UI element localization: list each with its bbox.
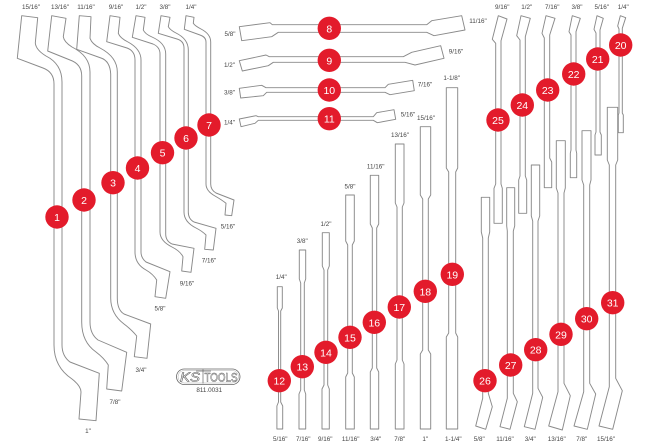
wrench 13: 3/8 x 7/16: 13 bbox=[296, 362, 308, 374]
wrench 4: 9/16 x 5/8: 5/8" bbox=[154, 306, 166, 312]
wrench 9: 1/2 x 9/16: 9 bbox=[326, 55, 332, 67]
wrench 23: 7/16 bbox=[536, 4, 560, 188]
wrench 28: 3/4: 28 bbox=[530, 345, 542, 357]
wrench 7: 1/4 x 5/16 bbox=[184, 4, 235, 230]
wrench 5: 1/2 x 9/16: 1/2" bbox=[136, 4, 146, 11]
wrench 1: 15/16 x 1 bbox=[17, 4, 99, 435]
wrench 11: 1/4 x 5/16: 1/4" bbox=[224, 120, 235, 126]
wrench 14: 1/2 x 9/16: 1/2" bbox=[320, 221, 332, 228]
wrench 27: 11/16: 11/16" bbox=[496, 436, 514, 443]
wrench 19: 1-1/8 x 1-1/4: 1-1/4" bbox=[445, 436, 462, 443]
wrench 28: 3/4: 3/4" bbox=[525, 436, 536, 443]
wrench 26: 5/8 bbox=[473, 197, 497, 443]
wrench 19: 1-1/8 x 1-1/4: 19 bbox=[446, 269, 458, 281]
wrench 5: 1/2 x 9/16 bbox=[132, 4, 194, 288]
wrench 12: 1/4 x 5/16 bbox=[268, 274, 291, 443]
wrench 14: 1/2 x 9/16: 14 bbox=[320, 347, 332, 359]
wrench 3: 11/16 x 3/4 bbox=[77, 4, 151, 374]
KS Tools logo: KS bbox=[180, 370, 201, 384]
wrench 12: 1/4 x 5/16: 1/4" bbox=[276, 274, 287, 281]
wrench 16: 11/16 x 3/4 bbox=[363, 164, 386, 443]
wrench 13: 3/8 x 7/16 bbox=[291, 238, 314, 443]
KS Tools logo bbox=[176, 369, 240, 394]
wrench 17: 13/16 x 7/8: 13/16" bbox=[391, 132, 409, 139]
wrench 6: 3/8 x 7/16 bbox=[158, 4, 216, 264]
wrench 4: 9/16 x 5/8 bbox=[107, 4, 170, 312]
wrench 10: 3/8 x 7/16 bbox=[224, 78, 432, 102]
wrench 18: 15/16 x 1: 18 bbox=[419, 286, 431, 298]
wrench 4: 9/16 x 5/8: 4 bbox=[135, 163, 141, 175]
wrench 22: 3/8: 22 bbox=[568, 69, 580, 81]
wrench 24: 1/2: 1/2" bbox=[521, 4, 532, 11]
wrench 1: 15/16 x 1: 1" bbox=[85, 428, 91, 435]
wrench 21: 5/16: 5/16" bbox=[594, 4, 609, 11]
wrench 2: 13/16 x 7/8: 13/16" bbox=[51, 4, 69, 11]
KS Tools logo: TOOLS bbox=[204, 370, 238, 384]
wrench 6: 3/8 x 7/16: 3/8" bbox=[160, 4, 170, 11]
wrench 20: 1/4: 1/4" bbox=[618, 4, 629, 11]
wrench 12: 1/4 x 5/16: 12 bbox=[273, 376, 285, 388]
wrench 6: 3/8 x 7/16: 6 bbox=[183, 133, 189, 145]
wrench 3: 11/16 x 3/4: 3/4" bbox=[136, 367, 146, 374]
wrench 10: 3/8 x 7/16: 3/8" bbox=[224, 90, 235, 96]
wrench 14: 1/2 x 9/16 bbox=[314, 221, 338, 443]
wrench 29: 13/16: 13/16" bbox=[548, 436, 566, 443]
wrench 13: 3/8 x 7/16: 7/16" bbox=[296, 436, 311, 443]
wrench 20: 1/4 bbox=[609, 4, 632, 133]
wrench 11: 1/4 x 5/16 bbox=[224, 107, 415, 130]
wrench 7: 1/4 x 5/16: 1/4" bbox=[186, 4, 196, 11]
wrench 13: 3/8 x 7/16: 3/8" bbox=[297, 238, 308, 245]
wrench 20: 1/4: 20 bbox=[615, 40, 627, 52]
wrench 14: 1/2 x 9/16: 9/16" bbox=[318, 436, 333, 443]
wrench 15: 5/8 x 11/16: 11/16" bbox=[342, 436, 359, 443]
wrench 15: 5/8 x 11/16 bbox=[338, 184, 362, 443]
wrench 29: 13/16: 29 bbox=[555, 329, 567, 341]
wrench 8: 5/8 x 11/16 bbox=[224, 16, 487, 41]
wrench 16: 11/16 x 3/4: 11/16" bbox=[367, 164, 384, 170]
wrench 11: 1/4 x 5/16: 5/16" bbox=[401, 112, 415, 118]
wrench 12: 1/4 x 5/16: 5/16" bbox=[273, 436, 288, 443]
wrench 27: 11/16 bbox=[496, 188, 522, 443]
wrench 19: 1-1/8 x 1-1/4 bbox=[441, 75, 464, 443]
wrench 16: 11/16 x 3/4: 3/4" bbox=[370, 436, 381, 443]
wrench 15: 5/8 x 11/16: 5/8" bbox=[344, 184, 356, 190]
wrench 29: 13/16 bbox=[548, 141, 573, 443]
wrench 1: 15/16 x 1: 15/16" bbox=[22, 4, 40, 11]
wrench 4: 9/16 x 5/8: 9/16" bbox=[109, 4, 123, 11]
wrench 18: 15/16 x 1 bbox=[414, 115, 437, 443]
wrench 3: 11/16 x 3/4: 11/16" bbox=[77, 4, 95, 11]
wrench 24: 1/2: 24 bbox=[516, 100, 528, 112]
wrench 3: 11/16 x 3/4: 3 bbox=[110, 178, 116, 190]
wrench 6: 3/8 x 7/16: 7/16" bbox=[202, 258, 216, 264]
wrench 23: 7/16: 23 bbox=[542, 85, 554, 97]
wrench 25: 9/16: 9/16" bbox=[495, 4, 510, 11]
wrench 9: 1/2 x 9/16: 9/16" bbox=[449, 48, 463, 56]
wrench 28: 3/4 bbox=[524, 165, 547, 443]
wrench 11: 1/4 x 5/16: 11 bbox=[324, 114, 335, 126]
wrench 2: 13/16 x 7/8: 2 bbox=[81, 195, 87, 207]
wrench 8: 5/8 x 11/16: 11/16" bbox=[469, 18, 487, 25]
wrench 2: 13/16 x 7/8: 7/8" bbox=[110, 399, 120, 406]
wrench 23: 7/16: 7/16" bbox=[545, 4, 560, 11]
wrench 10: 3/8 x 7/16: 10 bbox=[323, 85, 335, 97]
wrench 7: 1/4 x 5/16: 7 bbox=[206, 120, 212, 132]
wrench 30: 7/8 bbox=[574, 131, 598, 443]
wrench 16: 11/16 x 3/4: 16 bbox=[368, 317, 380, 329]
wrench 26: 5/8: 26 bbox=[479, 376, 491, 388]
wrench 25: 9/16: 25 bbox=[492, 115, 504, 127]
wrench 9: 1/2 x 9/16 bbox=[224, 46, 463, 72]
wrench 31: 15/16 bbox=[597, 107, 624, 443]
wrench 2: 13/16 x 7/8 bbox=[48, 4, 127, 406]
wrench 30: 7/8: 30 bbox=[581, 314, 593, 326]
wrench 18: 15/16 x 1: 15/16" bbox=[417, 115, 435, 122]
wrench 8: 5/8 x 11/16: 8 bbox=[326, 23, 332, 35]
article number: 811.0031 bbox=[196, 387, 223, 394]
wrench 5: 1/2 x 9/16: 9/16" bbox=[180, 280, 194, 288]
wrench 8: 5/8 x 11/16: 5/8" bbox=[224, 31, 236, 38]
wrench 5: 1/2 x 9/16: 5 bbox=[160, 148, 166, 160]
wrench 18: 15/16 x 1: 1" bbox=[422, 436, 428, 443]
wrench 22: 3/8: 3/8" bbox=[572, 4, 582, 11]
wrench 17: 13/16 x 7/8: 7/8" bbox=[394, 436, 405, 443]
wrench 10: 3/8 x 7/16: 7/16" bbox=[418, 82, 432, 88]
wrench 30: 7/8: 7/8" bbox=[576, 436, 587, 443]
wrench 25: 9/16 bbox=[486, 4, 510, 223]
wrench 19: 1-1/8 x 1-1/4: 1-1/8" bbox=[443, 75, 460, 82]
wrench 15: 5/8 x 11/16: 15 bbox=[344, 332, 356, 344]
wrench 22: 3/8 bbox=[562, 4, 585, 178]
wrench 24: 1/2 bbox=[511, 4, 534, 213]
wrench 9: 1/2 x 9/16: 1/2" bbox=[224, 62, 235, 69]
wrench 26: 5/8: 5/8" bbox=[474, 436, 485, 443]
wrench 1: 15/16 x 1: 1 bbox=[54, 212, 60, 224]
wrench 31: 15/16: 15/16" bbox=[597, 436, 615, 443]
wrench 21: 5/16 bbox=[586, 4, 609, 155]
wrench 17: 13/16 x 7/8: 17 bbox=[393, 302, 405, 314]
wrench 17: 13/16 x 7/8 bbox=[388, 132, 411, 443]
wrench 31: 15/16: 31 bbox=[607, 298, 619, 310]
wrench 21: 5/16: 21 bbox=[592, 54, 604, 66]
wrench 7: 1/4 x 5/16: 5/16" bbox=[221, 224, 235, 230]
wrench 27: 11/16: 27 bbox=[505, 360, 517, 372]
